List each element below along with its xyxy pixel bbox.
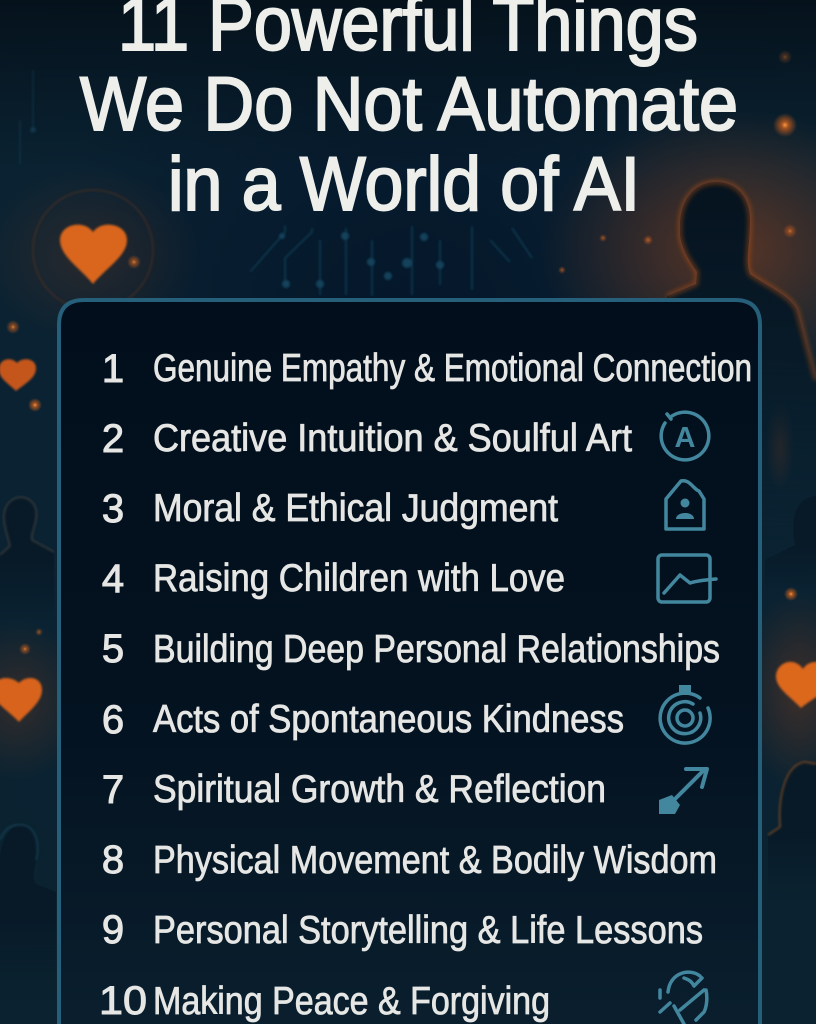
list item 4: 4 (102, 557, 124, 601)
title (80, 0, 738, 227)
list item 5: Building Deep Personal Relationships (153, 628, 720, 671)
icon: heart right (776, 662, 816, 708)
circuit traces (20, 70, 532, 296)
list item 10: 10 (99, 979, 147, 1023)
list item 9: Personal Storytelling & Life Lessons (153, 909, 703, 952)
icon: handshake (660, 972, 707, 1024)
list item 2: 2 (102, 417, 124, 461)
title: in a World of AI (168, 142, 640, 227)
list item 8: 8 (102, 838, 124, 882)
icon: small heart left top (0, 359, 36, 391)
sparks (6, 50, 798, 655)
panel: list (59, 300, 760, 1024)
list item 5: 5 (102, 627, 124, 671)
list item 8: Physical Movement & Bodily Wisdom (153, 839, 717, 882)
list item 10: Making Peace & Forgiving (153, 980, 550, 1023)
icon: chart frame (658, 555, 716, 602)
list item 7: 7 (102, 768, 124, 812)
list item 7: Spiritual Growth & Reflection (153, 768, 606, 811)
icon: heart left bottom (0, 678, 42, 722)
title: We Do Not Automate (80, 62, 738, 147)
silhouette: left lower person (0, 825, 56, 1000)
silhouette: right middle person (765, 496, 816, 590)
icon: circled A: A (675, 422, 696, 454)
list item 2: Creative Intuition & Soulful Art (153, 417, 632, 460)
list item 4: Raising Children with Love (153, 557, 565, 600)
icon: target (660, 685, 710, 743)
list item 3: 3 (102, 487, 124, 531)
list item 6: 6 (102, 698, 124, 742)
icon: arrow (659, 769, 707, 814)
icon: portrait house (666, 481, 704, 529)
list item 6: Acts of Spontaneous Kindness (153, 698, 624, 741)
silhouette: left middle person (0, 497, 54, 620)
silhouette: right lower person (768, 762, 816, 900)
silhouette: top right person (667, 182, 816, 560)
icon: large heart (33, 190, 153, 310)
list item 3: Moral & Ethical Judgment (153, 487, 558, 530)
icon: circled A (661, 412, 709, 460)
list item 9: 9 (102, 908, 124, 952)
list item 1: 1 (102, 347, 124, 391)
